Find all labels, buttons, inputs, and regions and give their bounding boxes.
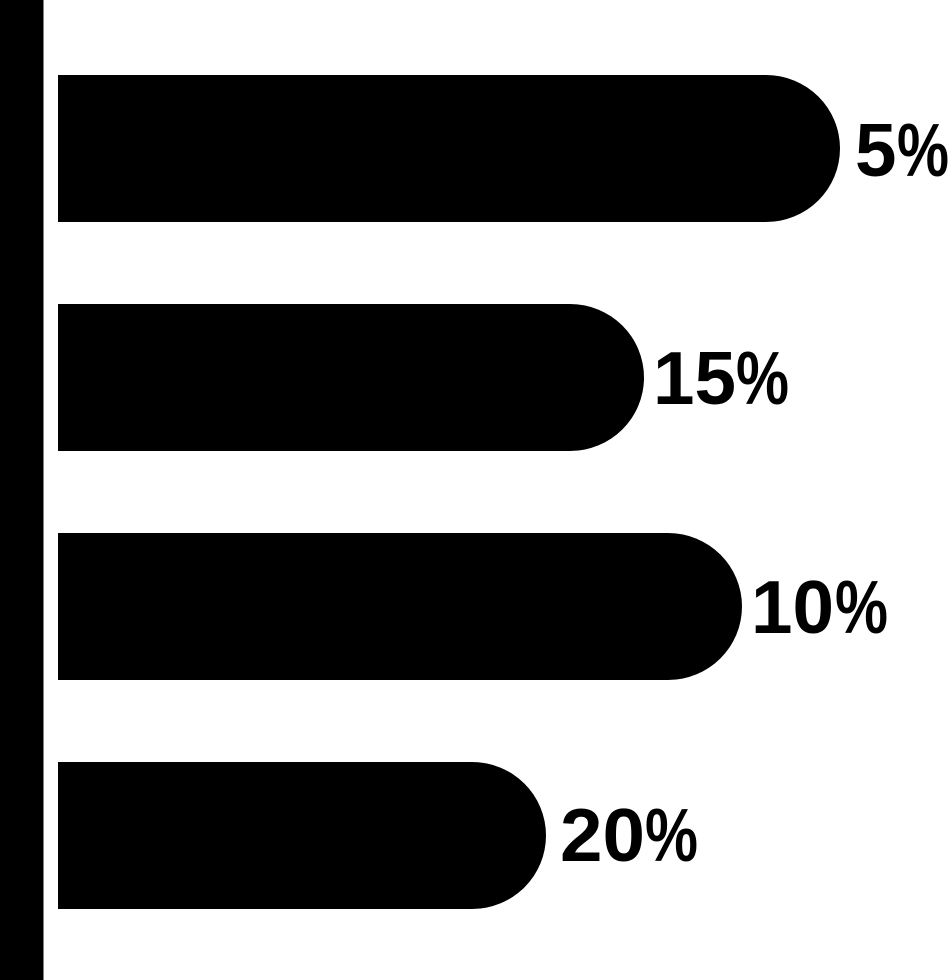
label: 20% bbox=[560, 793, 698, 877]
label: 5% bbox=[855, 108, 948, 192]
label: 15%: 15 bbox=[653, 336, 736, 420]
label: 10%: % bbox=[835, 565, 888, 649]
label: 15%: % bbox=[736, 336, 789, 420]
label: 10% bbox=[751, 565, 888, 649]
label: 20%: % bbox=[645, 793, 698, 877]
label: 15% bbox=[653, 336, 789, 420]
vertical axis bbox=[0, 0, 44, 980]
bar: 20% bbox=[58, 762, 698, 909]
label: 10%: 10 bbox=[751, 565, 834, 649]
bar: 10% bbox=[58, 533, 888, 680]
label: 20%: 20 bbox=[560, 793, 645, 877]
label: 5%: 5 bbox=[855, 108, 896, 192]
bar: 5% bbox=[58, 75, 948, 222]
bar: 15% bbox=[58, 304, 789, 451]
